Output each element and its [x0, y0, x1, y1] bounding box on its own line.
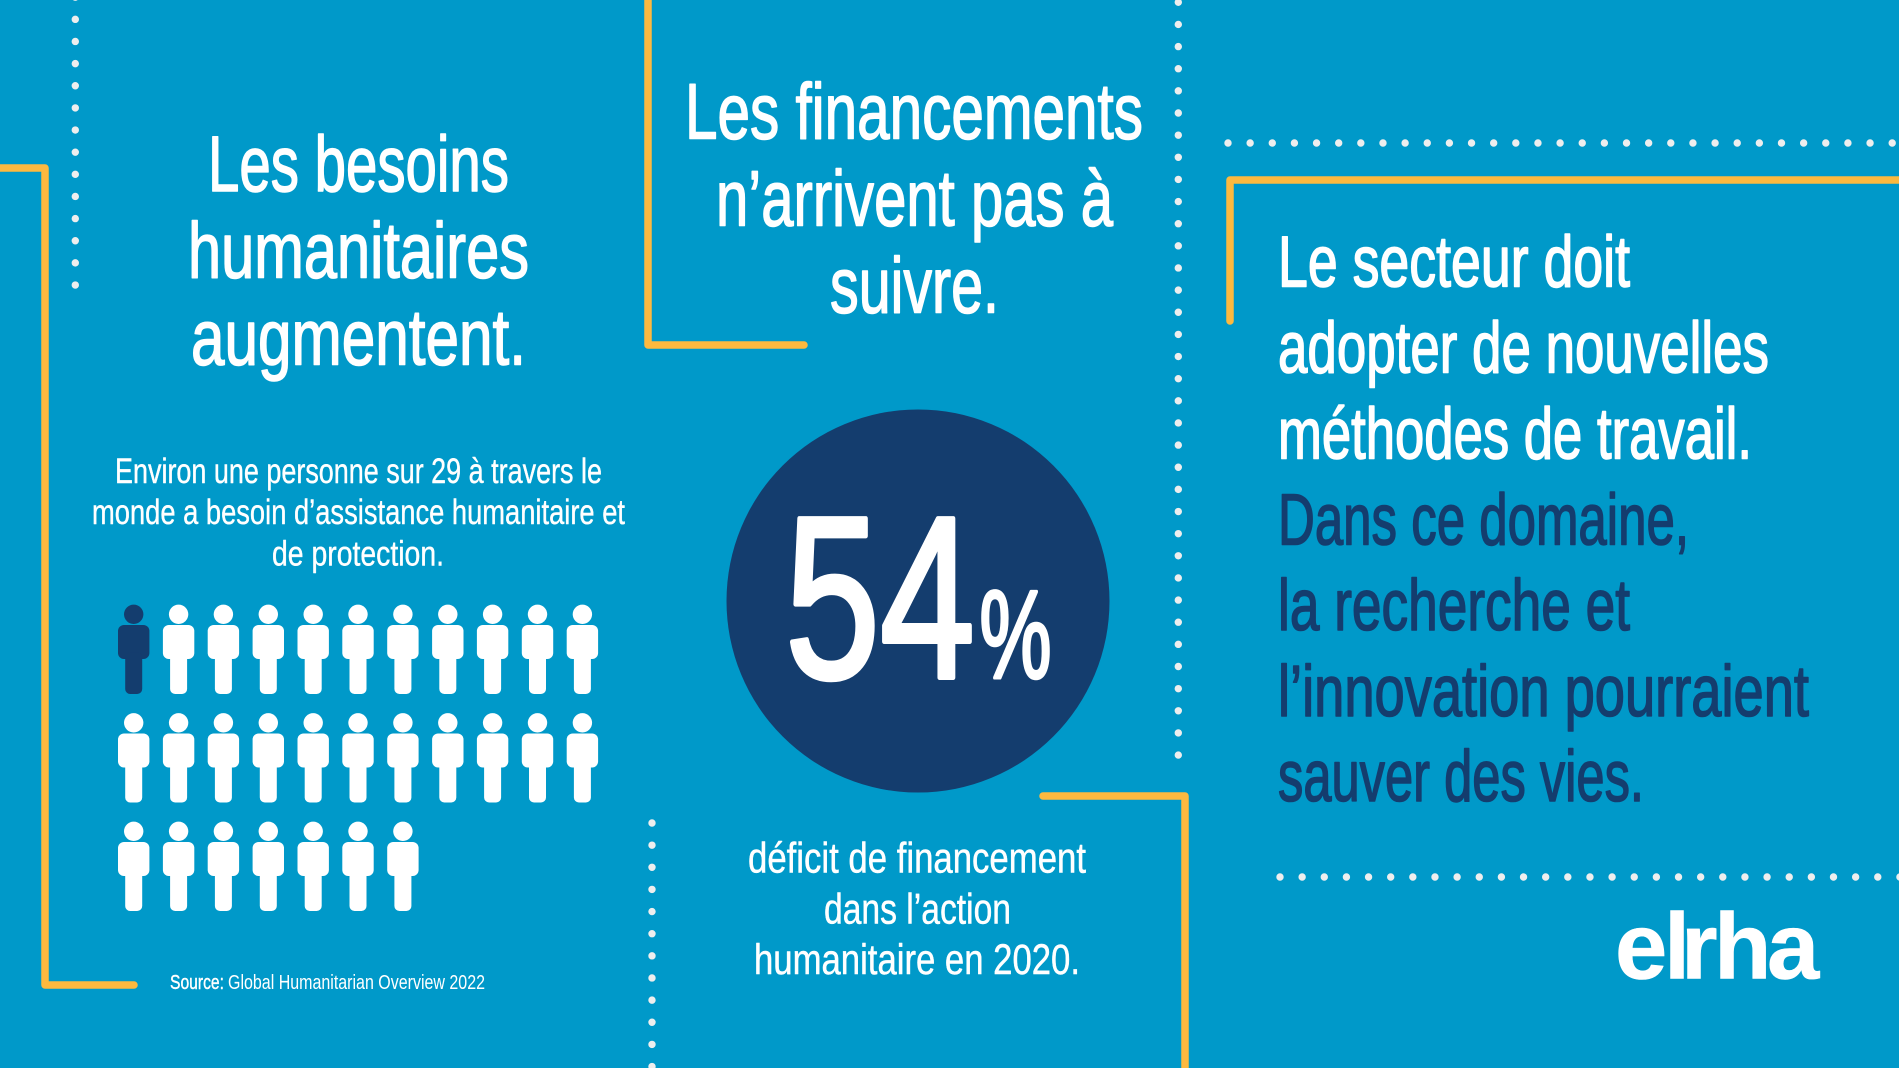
text block: one person in 29	[92, 452, 625, 574]
bracket: left panel	[0, 168, 134, 985]
source note	[170, 972, 485, 994]
panel: humanitarian needs	[92, 119, 625, 994]
heading: needs increase: humanitaires	[188, 206, 529, 294]
bracket: middle bottom	[1043, 796, 1185, 1068]
bracket: middle top	[648, 0, 804, 345]
text block: one person in 29: monde a besoin d’assistance humanitaire et	[92, 493, 625, 532]
statement: navy lines: Dans ce domaine,	[1278, 480, 1689, 560]
panel: new ways of working	[1278, 222, 1809, 817]
statement: navy lines: la recherche et	[1278, 566, 1630, 646]
heading: needs increase	[188, 119, 529, 382]
caption: funding shortfall: humanitaire en 2020.	[754, 936, 1080, 984]
bracket: right panel	[1230, 180, 1899, 321]
stat circle: 54%: %	[980, 566, 1052, 705]
caption: funding shortfall: dans l’action	[824, 886, 1011, 934]
text block: one person in 29: de protection.	[272, 534, 444, 574]
statement: navy lines: sauver des vies.	[1278, 737, 1644, 817]
pictogram: 29 people, one highlighted	[118, 605, 598, 911]
heading: funding not keeping up: Les financements	[685, 66, 1143, 156]
text block: one person in 29: Environ une personne sur 29 à travers le	[115, 452, 602, 491]
logo: elrha: elrha	[1615, 894, 1820, 998]
heading: needs increase: Les besoins	[208, 119, 509, 208]
stat circle: 54%: 54	[785, 468, 975, 726]
statement: navy lines	[1278, 480, 1809, 817]
heading: funding not keeping up: n’arrivent pas à	[716, 154, 1113, 242]
source note: Global Humanitarian Overview 2022	[228, 972, 485, 994]
heading: funding not keeping up: suivre.	[830, 240, 999, 330]
panel: funding	[685, 66, 1143, 984]
statement: white lines	[1278, 222, 1769, 474]
caption: funding shortfall	[748, 834, 1086, 984]
stat circle: 54%	[726, 410, 1110, 792]
source note: Source:	[170, 972, 224, 994]
caption: funding shortfall: déficit de financement	[748, 834, 1086, 882]
heading: funding not keeping up	[685, 66, 1143, 330]
heading: needs increase: augmentent.	[191, 292, 526, 382]
statement: white lines: Le secteur doit	[1278, 222, 1630, 302]
